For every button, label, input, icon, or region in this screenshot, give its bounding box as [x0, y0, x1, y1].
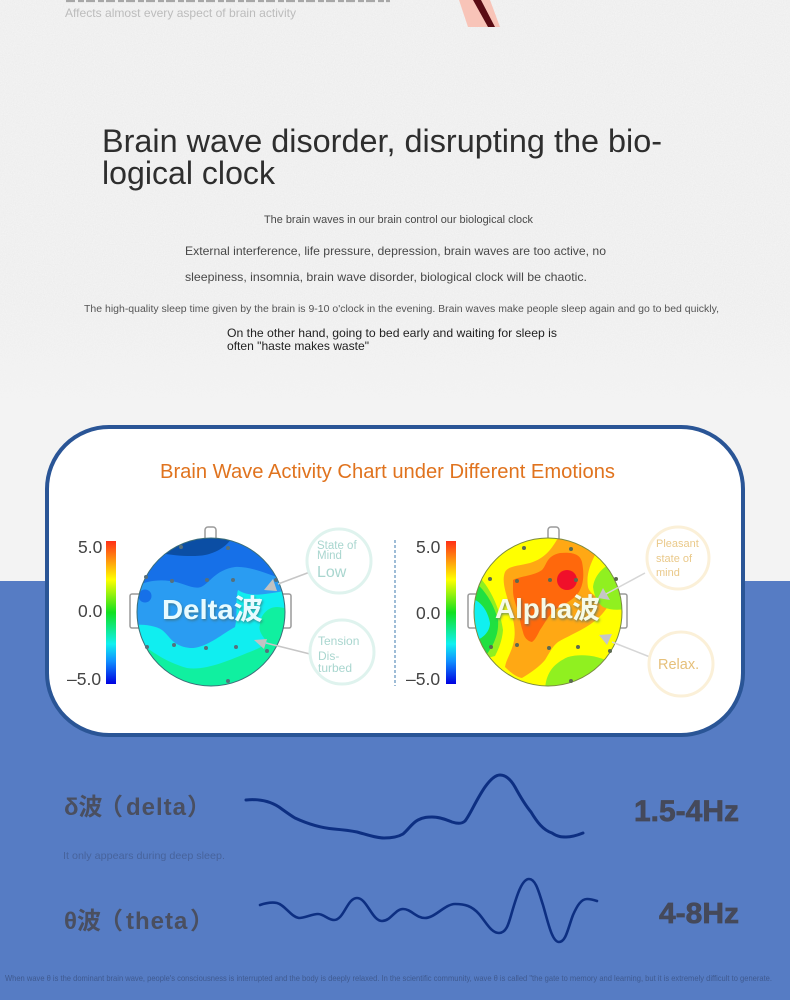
panel: brain wave activity chart — [47, 427, 743, 735]
delta frequency: 1.5-4Hz — [634, 795, 739, 828]
delta head map: Delta波 — [162, 594, 263, 625]
callout: state of mind low: Low — [317, 564, 347, 581]
callout: pleasant state of mind — [647, 527, 709, 589]
delta note: It only appears during deep sleep. — [63, 850, 225, 862]
callout: relax: Relax. — [658, 657, 699, 673]
delta head map — [130, 527, 295, 695]
panel card — [47, 427, 743, 735]
illustration fragment: pink tissue — [459, 0, 500, 27]
callout: pleasant state of mind: state of — [656, 553, 693, 565]
top caption: Affects almost every aspect of brain activity — [65, 6, 296, 20]
callout: tension disturbed: Dis- — [318, 649, 339, 663]
alpha colour scale: 5.0 — [416, 537, 441, 557]
divider — [394, 540, 396, 686]
alpha colour scale: –5.0 — [406, 669, 440, 689]
alpha colour scale — [406, 537, 456, 689]
delta label: ） — [187, 794, 211, 821]
arrow: pleasant state — [598, 573, 645, 600]
delta label: delta — [126, 794, 187, 821]
callout: state of mind low: State of — [317, 540, 357, 552]
background: light paper section — [0, 0, 790, 581]
heading: logical clock — [102, 155, 276, 191]
callout: tension disturbed — [310, 620, 374, 684]
theta wave — [260, 879, 597, 942]
delta colour scale: –5.0 — [67, 669, 101, 689]
heading — [102, 123, 662, 191]
theta frequency: 4-8Hz — [659, 898, 739, 930]
body text block: External interference, life pressure, depression, brain waves are too active, no — [185, 244, 606, 258]
delta label: （ — [99, 794, 123, 821]
arrow: relax — [599, 634, 650, 657]
callout: relax — [649, 632, 713, 696]
callout: pleasant state of mind: Pleasant — [656, 538, 699, 550]
clipped heading remnant at top edge — [66, 0, 390, 2]
background: paper texture — [0, 0, 790, 400]
heading: Brain wave disorder, disrupting the bio- — [102, 123, 662, 159]
callout: state of mind low — [307, 529, 371, 593]
callout: pleasant state of mind: mind — [656, 567, 680, 579]
delta wave — [246, 775, 583, 838]
alpha head map — [468, 527, 632, 692]
background: blue section — [0, 581, 790, 1000]
arrow: state of mind — [264, 572, 310, 591]
closing note: often "haste makes waste" — [227, 339, 369, 353]
body text block: sleepiness, insomnia, brain wave disorder, biological clock will be chaotic. — [185, 270, 587, 284]
delta colour scale: 5.0 — [78, 537, 103, 557]
theta label: （ — [99, 908, 123, 935]
delta colour scale — [67, 537, 116, 689]
theta label: theta — [126, 908, 188, 935]
delta label: δ波 — [64, 794, 103, 821]
callout: tension disturbed: Tension — [318, 634, 359, 648]
alpha head map: Alpha波 — [495, 593, 600, 624]
theta label: θ波 — [64, 908, 101, 935]
closing note — [227, 326, 557, 353]
theta label: ） — [190, 908, 214, 935]
body text block — [84, 214, 719, 315]
alpha colour scale: 0.0 — [416, 603, 441, 623]
body text block: The high-quality sleep time given by the brain is 9-10 o'clock in the evening. Brain waves make people sleep again and go to bed quickly, — [84, 304, 719, 315]
closing note: On the other hand, going to bed early and waiting for sleep is — [227, 326, 557, 340]
arrow: tension — [254, 639, 310, 654]
callout: tension disturbed: turbed — [318, 661, 352, 675]
callout: state of mind low: Mind — [317, 550, 342, 562]
chart title: Brain Wave Activity Chart under Different Emotions — [160, 461, 615, 483]
body text block: The brain waves in our brain control our biological clock — [264, 214, 533, 226]
delta colour scale: 0.0 — [78, 601, 103, 621]
